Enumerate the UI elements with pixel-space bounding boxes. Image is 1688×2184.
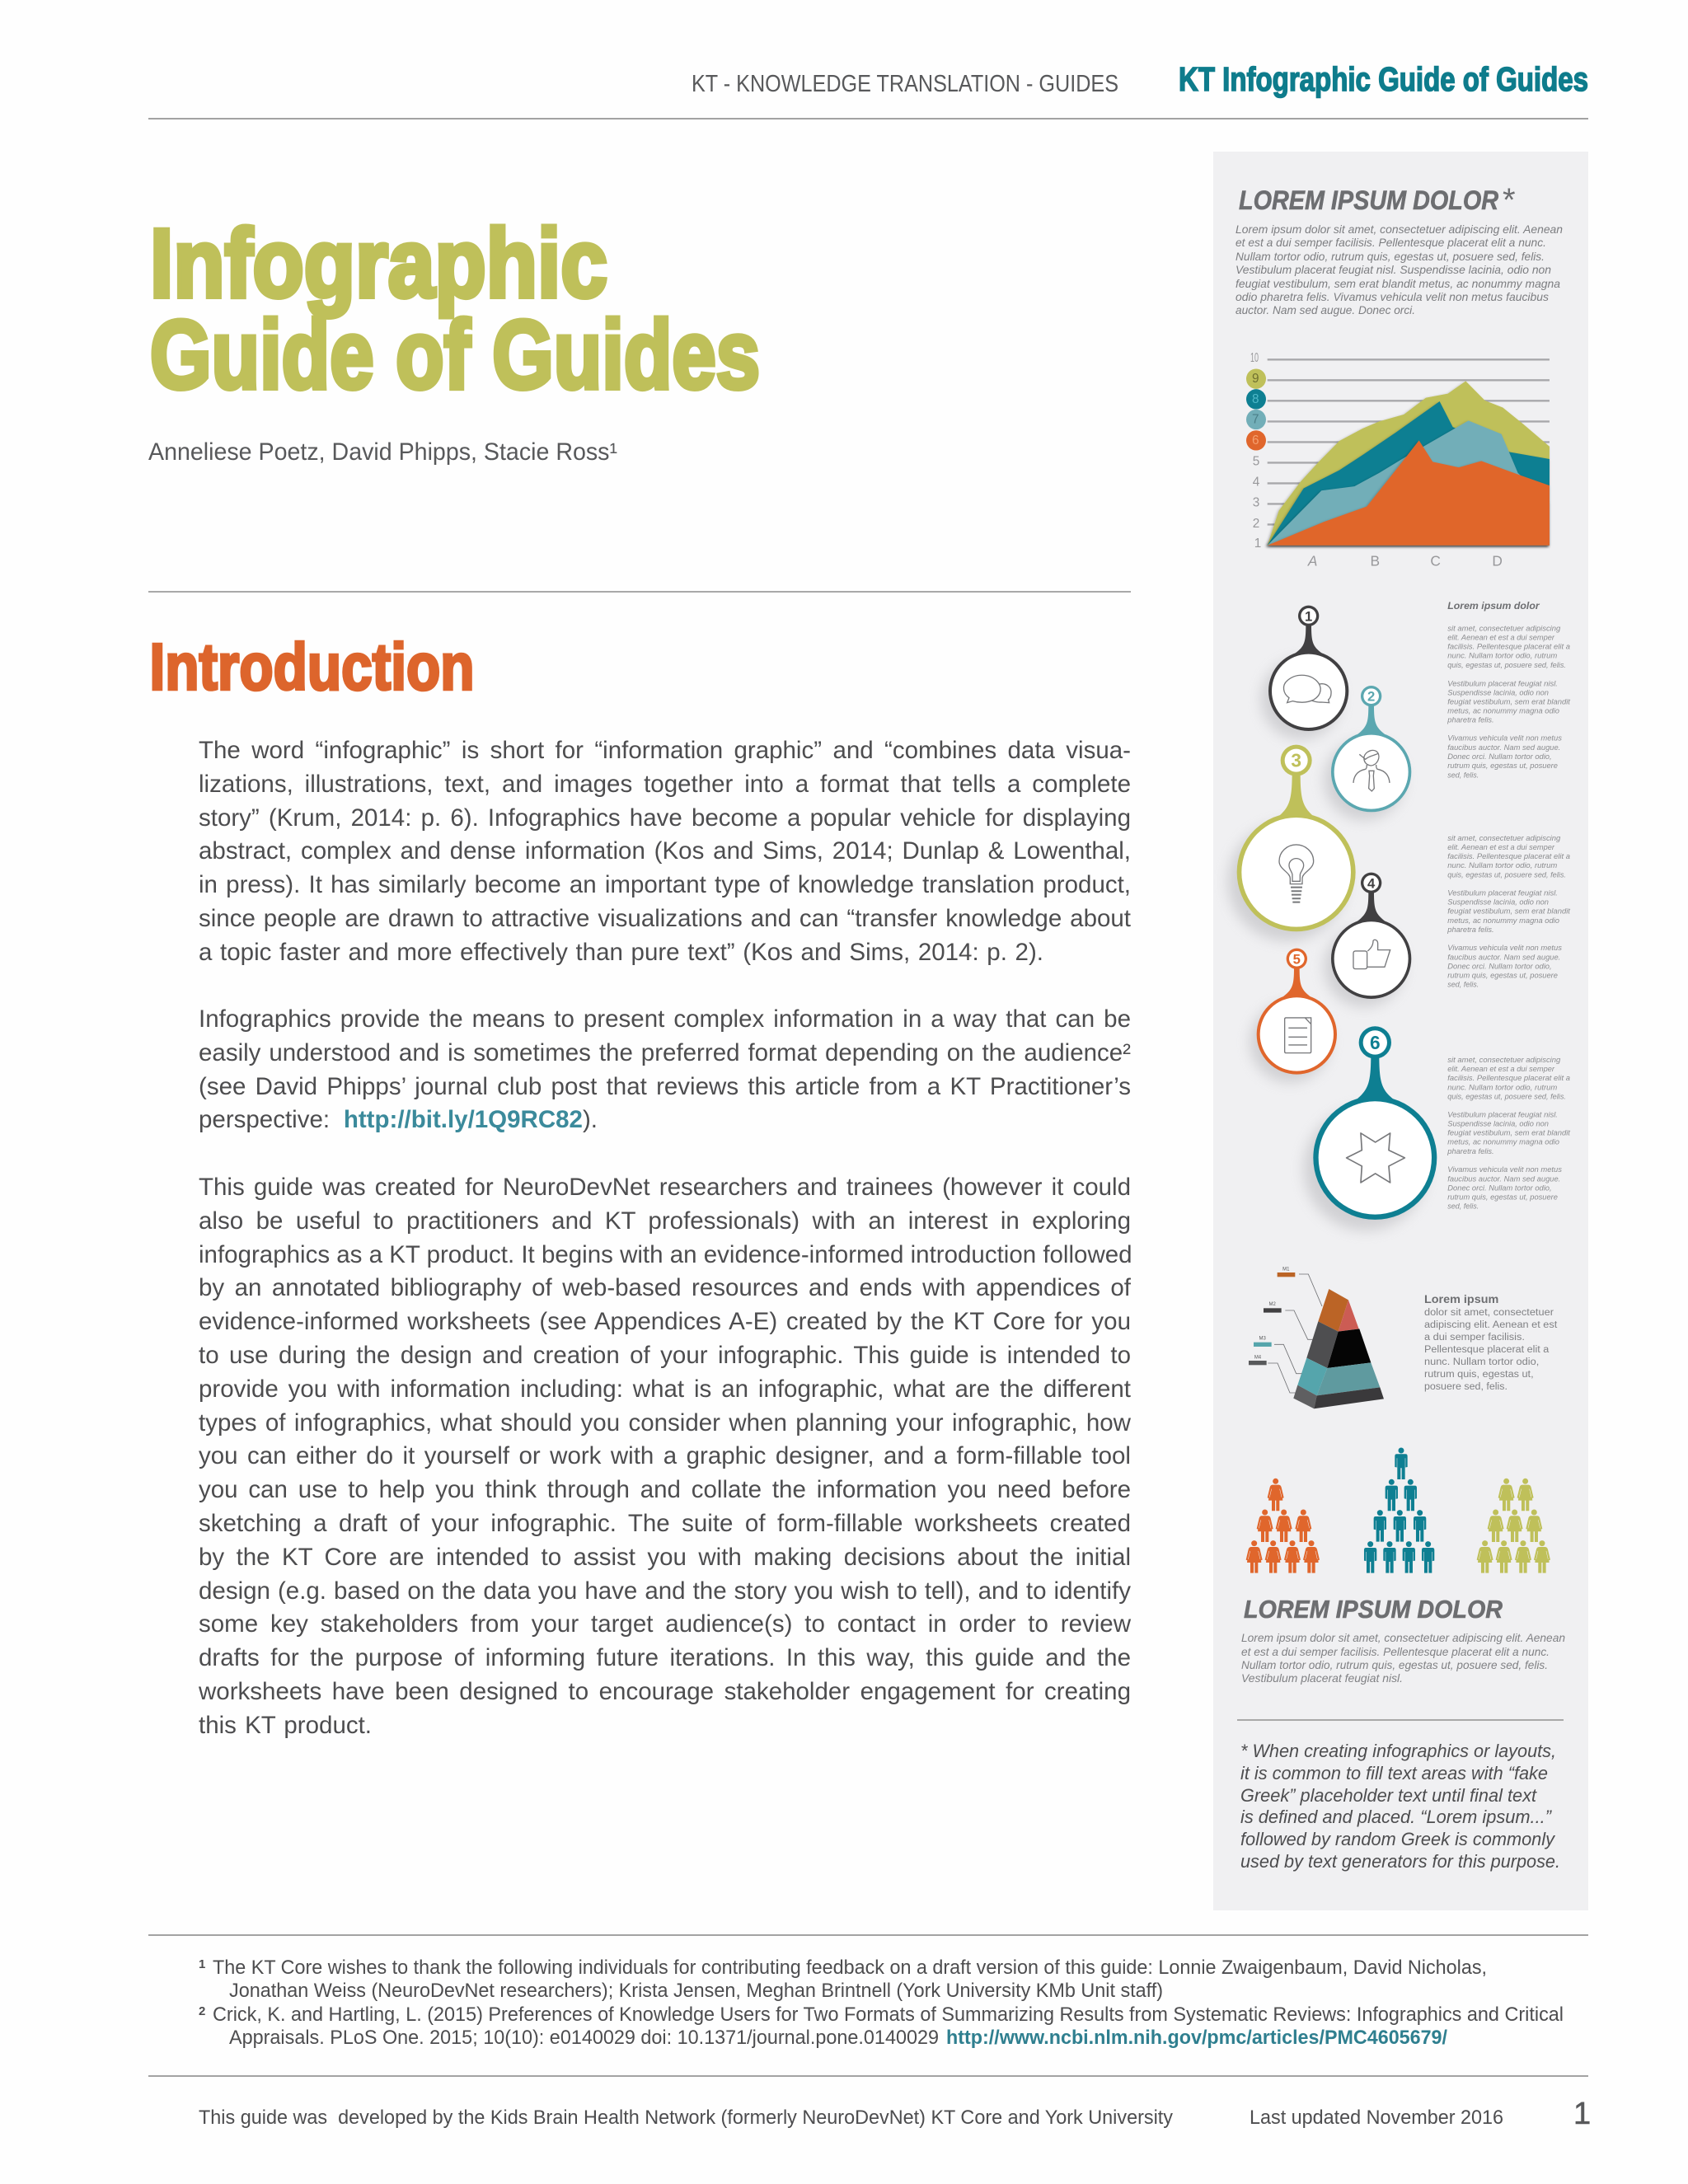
pyramid caption: Lorem ipsum xyxy=(1424,1292,1498,1305)
pin 5: document xyxy=(1257,949,1337,1075)
footer: This guide was developed by the Kids Brain Health Network (formerly NeuroDevNet) KT Core and York University xyxy=(199,2107,1173,2129)
caption block 1: facilisis. Pellentesque placerat elit a xyxy=(1447,643,1570,651)
heading: introduction: Introduction xyxy=(150,630,475,704)
paragraph 1: in press). It has similarly become an important type of knowledge translation product, xyxy=(199,871,1131,898)
footnotes: Crick, K. and Hartling, L. (2015) Preferences of Knowledge Users for Two Formats of Summarizing Results from Systematic Reviews: Infographics and Critical xyxy=(213,2004,1564,2026)
caption block 3: Vivamus vehicula velit non metus xyxy=(1447,1165,1562,1174)
olive women xyxy=(1477,1479,1550,1573)
paragraph 3: infographics as a KT product. It begins with an evidence-informed introduction followed xyxy=(199,1241,1132,1268)
pyramid caption: Pellentesque placerat elit a xyxy=(1424,1343,1549,1355)
page number: 1 xyxy=(1573,2097,1591,2131)
x-axis labels: A xyxy=(1307,552,1317,569)
x-axis labels: C xyxy=(1430,552,1441,569)
caption block 3: sed, felis. xyxy=(1447,1202,1479,1211)
y-axis labels: 9 xyxy=(1252,372,1259,386)
paragraph 3: provide you with information including: what is an infographic, what are the different xyxy=(199,1376,1131,1403)
x-axis labels xyxy=(1307,552,1503,569)
lower sidebar text: Vestibulum placerat feugiat nisl. xyxy=(1241,1671,1403,1685)
paragraph 3: you can use to help you think through and collate the information you need before xyxy=(199,1476,1131,1503)
y-axis labels: 5 xyxy=(1253,454,1259,468)
caption block 1 xyxy=(1447,625,1570,779)
people pictograms xyxy=(1246,1447,1550,1573)
sidebar intro text: et est a dui semper facilisis. Pellentesque placerat elit a nunc. xyxy=(1236,236,1546,249)
pyramid caption: nunc. Nullam tortor odio, xyxy=(1424,1356,1539,1367)
footnotes: 1 xyxy=(199,1957,205,1971)
area: orange xyxy=(1268,440,1550,546)
caption block 2: quis, egestas ut, posuere sed, felis. xyxy=(1447,870,1566,879)
pin 4: thumbs up xyxy=(1331,873,1411,999)
caption block 3: faucibus auctor. Nam sed augue. xyxy=(1447,1174,1560,1183)
pin 2: person xyxy=(1331,686,1411,812)
caption block 3: Suspendisse lacinia, odio non xyxy=(1447,1120,1549,1128)
lower sidebar text: et est a dui semper facilisis. Pellentesque placerat elit a nunc. xyxy=(1241,1645,1550,1658)
pyramid legend: M2 xyxy=(1268,1302,1276,1307)
pyramid legend xyxy=(1249,1267,1322,1393)
caption block 2: Suspendisse lacinia, odio non xyxy=(1447,898,1549,907)
pin 1: speech bubbles xyxy=(1268,606,1348,731)
sidebar intro text xyxy=(1236,223,1563,316)
caption block 2: Vestibulum placerat feugiat nisl. xyxy=(1447,889,1558,898)
paragraph 1 xyxy=(199,737,1131,966)
caption block 2: sed, felis. xyxy=(1447,981,1479,989)
lorem ipsum note: used by text generators for this purpose. xyxy=(1240,1851,1560,1872)
footnotes: The KT Core wishes to thank the following individuals for contributing feedback on a draft version of this guide: Lonnie Zwaigenbaum, David Nicholas, xyxy=(213,1957,1487,1979)
paragraph 3: by an annotated bibliography of web-based resources and ends with appendices of xyxy=(199,1274,1131,1301)
header guide name: KT Infographic Guide of Guides xyxy=(1179,60,1588,98)
paragraph 2: Infographics provide the means to present complex information in a way that can be xyxy=(199,1005,1131,1033)
pin 6: star: 6 xyxy=(1370,1032,1381,1053)
lorem ipsum note: it is common to fill text areas with “fake xyxy=(1240,1763,1548,1783)
title xyxy=(150,209,760,410)
caption block 1: rutrum quis, egestas ut, posuere xyxy=(1447,762,1558,770)
caption block 1: elit. Aenean et est a dui semper xyxy=(1447,634,1555,642)
authors: Anneliese Poetz, David Phipps, Stacie Ross¹ xyxy=(148,438,617,466)
sidebar intro text: feugiat vestibulum, sem erat blandit metus, ac nonummy magna xyxy=(1236,277,1560,290)
caption block 1: nunc. Nullam tortor odio, rutrum xyxy=(1447,652,1558,660)
pin 5: document: 5 xyxy=(1293,951,1301,967)
lorem ipsum note: * When creating infographics or layouts, xyxy=(1240,1741,1556,1761)
title: Infographic xyxy=(150,209,607,318)
caption block 2: metus, ac nonummy magna odio xyxy=(1447,916,1559,925)
caption block 3: metus, ac nonummy magna odio xyxy=(1447,1138,1559,1146)
y-axis labels: 6 xyxy=(1252,434,1259,448)
y-axis labels: 4 xyxy=(1253,475,1260,489)
pyramid caption: rutrum quis, egestas ut, xyxy=(1424,1368,1534,1380)
caption block 1: sit amet, consectetuer adipiscing xyxy=(1447,625,1560,633)
pyramid legend: M1 xyxy=(1282,1267,1290,1272)
x-axis labels: B xyxy=(1371,552,1380,569)
caption block 2 xyxy=(1447,834,1570,989)
paragraph 1: The word “infographic” is short for “information graphic” and “combines data visua- xyxy=(199,737,1131,764)
header: running title xyxy=(692,60,1588,98)
caption block 3: quis, egestas ut, posuere sed, felis. xyxy=(1447,1092,1566,1100)
paragraph 3: also be useful to practitioners and KT professionals) with an interest in exploring xyxy=(199,1207,1131,1235)
caption block 2: pharetra felis. xyxy=(1447,926,1494,934)
caption block 1: metus, ac nonummy magna odio xyxy=(1447,707,1559,715)
paragraph 1: since people are drawn to attractive visualizations and can “transfer knowledge about xyxy=(199,905,1131,932)
lower sidebar text: Nullam tortor odio, rutrum quis, egestas ut, posuere sed, felis. xyxy=(1241,1658,1548,1671)
lorem ipsum note: is defined and placed. “Lorem ipsum...” xyxy=(1240,1807,1553,1827)
caption block 3: pharetra felis. xyxy=(1447,1147,1494,1155)
paragraph 3: worksheets have been designed to encourage stakeholder engagement for creating xyxy=(199,1678,1131,1705)
y-axis badges xyxy=(1246,368,1266,451)
paragraph 1: lizations, illustrations, text, and images together into a format that tells a complete xyxy=(199,771,1131,798)
pin 3: light bulb xyxy=(1237,745,1356,931)
body text xyxy=(199,737,1132,1739)
y-axis labels: 8 xyxy=(1252,392,1259,406)
paragraph 1: story” (Krum, 2014: p. 6). Infographics have become a popular vehicle for displaying xyxy=(199,804,1131,832)
footer: Last updated November 2016 xyxy=(1250,2107,1503,2129)
lower sidebar text xyxy=(1241,1631,1565,1685)
asterisk: * xyxy=(1503,182,1516,218)
paragraph 3: some key stakeholders from your target audience(s) to contact in order to review xyxy=(199,1610,1131,1638)
caption block 2: rutrum quis, egestas ut, posuere xyxy=(1447,971,1558,979)
caption block 1: pharetra felis. xyxy=(1447,716,1494,724)
paragraph 3: this KT product. xyxy=(199,1712,372,1739)
caption block 2: Donec orci. Nullam tortor odio, xyxy=(1447,962,1552,970)
paragraph 2: easily understood and is sometimes the preferred format depending on the audience² xyxy=(199,1039,1131,1066)
caption block 2: faucibus auctor. Nam sed augue. xyxy=(1447,953,1560,961)
paragraph 3: you can either do it yourself or work with a graphic designer, and a form-fillable tool xyxy=(199,1442,1131,1469)
pyramid caption: posuere sed, felis. xyxy=(1424,1380,1507,1392)
paragraph 3: sketching a draft of your infographic. The suite of form-fillable worksheets created xyxy=(199,1510,1131,1537)
caption block 3: facilisis. Pellentesque placerat elit a xyxy=(1447,1074,1570,1082)
pyramid caption: a dui semper facilisis. xyxy=(1424,1331,1525,1343)
area: olive xyxy=(1268,381,1550,546)
sidebar intro text: auctor. Nam sed augue. Donec orci. xyxy=(1236,303,1415,316)
caption block 1: sed, felis. xyxy=(1447,771,1479,779)
y-axis labels: 10 xyxy=(1250,351,1259,365)
paragraph 3: to use during the design and creation of your infographic. This guide is intended to xyxy=(199,1342,1131,1369)
lorem ipsum note: Greek” placeholder text until final text xyxy=(1240,1785,1537,1806)
paragraph 3: drafts for the purpose of informing future iterations. In this way, this guide and the xyxy=(199,1644,1131,1671)
y-axis labels: 2 xyxy=(1253,517,1259,531)
footnotes: 2 xyxy=(199,2004,205,2018)
pin 3: light bulb: 3 xyxy=(1291,750,1301,771)
pyramid caption xyxy=(1424,1292,1558,1392)
pyramid caption: adipiscing elit. Aenean et est xyxy=(1424,1319,1558,1330)
paragraph 1: abstract, complex and dense information (Kos and Sims, 2014; Dunlap & Lowenthal, xyxy=(199,837,1131,865)
caption block 2: feugiat vestibulum, sem erat blandit xyxy=(1447,907,1570,916)
pyramid chart xyxy=(1249,1267,1384,1408)
pin 6: star xyxy=(1313,1026,1437,1220)
caption block 3: feugiat vestibulum, sem erat blandit xyxy=(1447,1129,1570,1137)
paragraph 2 xyxy=(199,1005,1131,1133)
area: light teal xyxy=(1268,420,1550,546)
caption block 2: sit amet, consectetuer adipiscing xyxy=(1447,834,1560,842)
y-axis labels: 3 xyxy=(1253,495,1259,509)
caption block 3: elit. Aenean et est a dui semper xyxy=(1447,1065,1555,1073)
pyramid legend: M3 xyxy=(1259,1336,1266,1341)
caption block 2: elit. Aenean et est a dui semper xyxy=(1447,843,1555,851)
lorem ipsum note xyxy=(1240,1741,1560,1872)
caption block 3: sit amet, consectetuer adipiscing xyxy=(1447,1056,1560,1064)
paragraph 1: a topic faster and more effectively than pure text” (Kos and Sims, 2014: p. 2). xyxy=(199,939,1043,966)
teal men xyxy=(1364,1447,1434,1573)
pin 2: person: 2 xyxy=(1367,689,1375,705)
caption block 1: faucibus auctor. Nam sed augue. xyxy=(1447,743,1560,752)
paragraph 3: This guide was created for NeuroDevNet researchers and trainees (however it could xyxy=(199,1174,1131,1201)
lower sidebar heading: LOREM IPSUM DOLOR xyxy=(1244,1595,1503,1624)
paragraph 3 xyxy=(199,1174,1132,1739)
footnotes: Jonathan Weiss (NeuroDevNet researchers); Krista Jensen, Meghan Brintnell (York University KMb Unit staff) xyxy=(229,1980,1163,2002)
paragraph 3: evidence-informed worksheets (see Appendices A-E) created by the KT Core for you xyxy=(199,1308,1131,1335)
pin 1: speech bubbles: 1 xyxy=(1305,608,1312,624)
caption block 1: feugiat vestibulum, sem erat blandit xyxy=(1447,697,1570,705)
sidebar intro text: Nullam tortor odio, rutrum quis, egestas ut, posuere sed, felis. xyxy=(1236,250,1545,263)
sidebar intro text: odio pharetra felis. Vivamus vehicula velit non metus faucibus xyxy=(1236,290,1549,303)
paragraph 2: perspective: http://bit.ly/1Q9RC82). xyxy=(199,1106,598,1133)
caption block 2: facilisis. Pellentesque placerat elit a xyxy=(1447,852,1570,860)
process pins xyxy=(1228,606,1437,1230)
caption block 1: quis, egestas ut, posuere sed, felis. xyxy=(1447,661,1566,669)
pin 4: thumbs up: 4 xyxy=(1367,875,1376,891)
pyramid legend: M4 xyxy=(1254,1355,1262,1360)
caption block 3: nunc. Nullam tortor odio, rutrum xyxy=(1447,1083,1558,1091)
lower sidebar text: Lorem ipsum dolor sit amet, consectetuer adipiscing elit. Aenean xyxy=(1241,1631,1565,1644)
panel: sidebar sample infographic xyxy=(1213,152,1588,1910)
paragraph 3: by the KT Core are intended to assist you with making decisions about the initial xyxy=(199,1544,1131,1571)
area: teal xyxy=(1268,401,1550,546)
footer xyxy=(199,2097,1591,2131)
footnotes xyxy=(199,1957,1564,2049)
sidebar intro text: Lorem ipsum dolor sit amet, consectetuer adipiscing elit. Aenean xyxy=(1236,223,1563,236)
title: Guide of Guides xyxy=(150,301,760,410)
caption block 1: Donec orci. Nullam tortor odio, xyxy=(1447,752,1552,761)
pins caption text xyxy=(1447,600,1570,1211)
caption block 3: Vestibulum placerat feugiat nisl. xyxy=(1447,1111,1558,1119)
caption block 1: Vivamus vehicula velit non metus xyxy=(1447,734,1562,743)
lorem ipsum note: followed by random Greek is commonly xyxy=(1240,1829,1556,1849)
footnotes: http://www.ncbi.nlm.nih.gov/pmc/articles/PMC4605679/ xyxy=(946,2027,1447,2049)
header label: KT - KNOWLEDGE TRANSLATION - GUIDES xyxy=(692,71,1118,97)
y-axis labels: 1 xyxy=(1254,537,1261,551)
sidebar intro text: Vestibulum placerat feugiat nisl. Suspendisse lacinia, odio non xyxy=(1236,263,1551,276)
pins caption text: Lorem ipsum dolor xyxy=(1447,600,1540,612)
caption block 1: Suspendisse lacinia, odio non xyxy=(1447,688,1549,696)
caption block 3: rutrum quis, egestas ut, posuere xyxy=(1447,1193,1558,1201)
paragraph 2: (see David Phipps’ journal club post that reviews this article from a KT Practitioner’s xyxy=(199,1073,1131,1100)
paragraph 3: types of infographics, what should you consider when planning your infographic, how xyxy=(199,1409,1131,1436)
sidebar heading: LOREM IPSUM DOLOR xyxy=(1239,185,1498,215)
y-axis labels: 7 xyxy=(1252,413,1259,427)
x-axis labels: D xyxy=(1492,552,1503,569)
orange women xyxy=(1246,1479,1320,1573)
y-axis labels xyxy=(1250,351,1261,551)
caption block 3: Donec orci. Nullam tortor odio, xyxy=(1447,1183,1552,1192)
caption block 2: Vivamus vehicula velit non metus xyxy=(1447,944,1562,952)
caption block 1: Vestibulum placerat feugiat nisl. xyxy=(1447,679,1558,687)
paragraph 3: design (e.g. based on the data you have and the story you wish to tell), and to identify xyxy=(199,1577,1131,1605)
caption block 3 xyxy=(1447,1056,1570,1211)
caption block 2: nunc. Nullam tortor odio, rutrum xyxy=(1447,861,1558,869)
area chart xyxy=(1246,351,1550,569)
footnotes: Appraisals. PLoS One. 2015; 10(10): e0140029 doi: 10.1371/journal.pone.0140029 xyxy=(229,2027,939,2049)
pyramid caption: dolor sit amet, consectetuer xyxy=(1424,1306,1554,1318)
